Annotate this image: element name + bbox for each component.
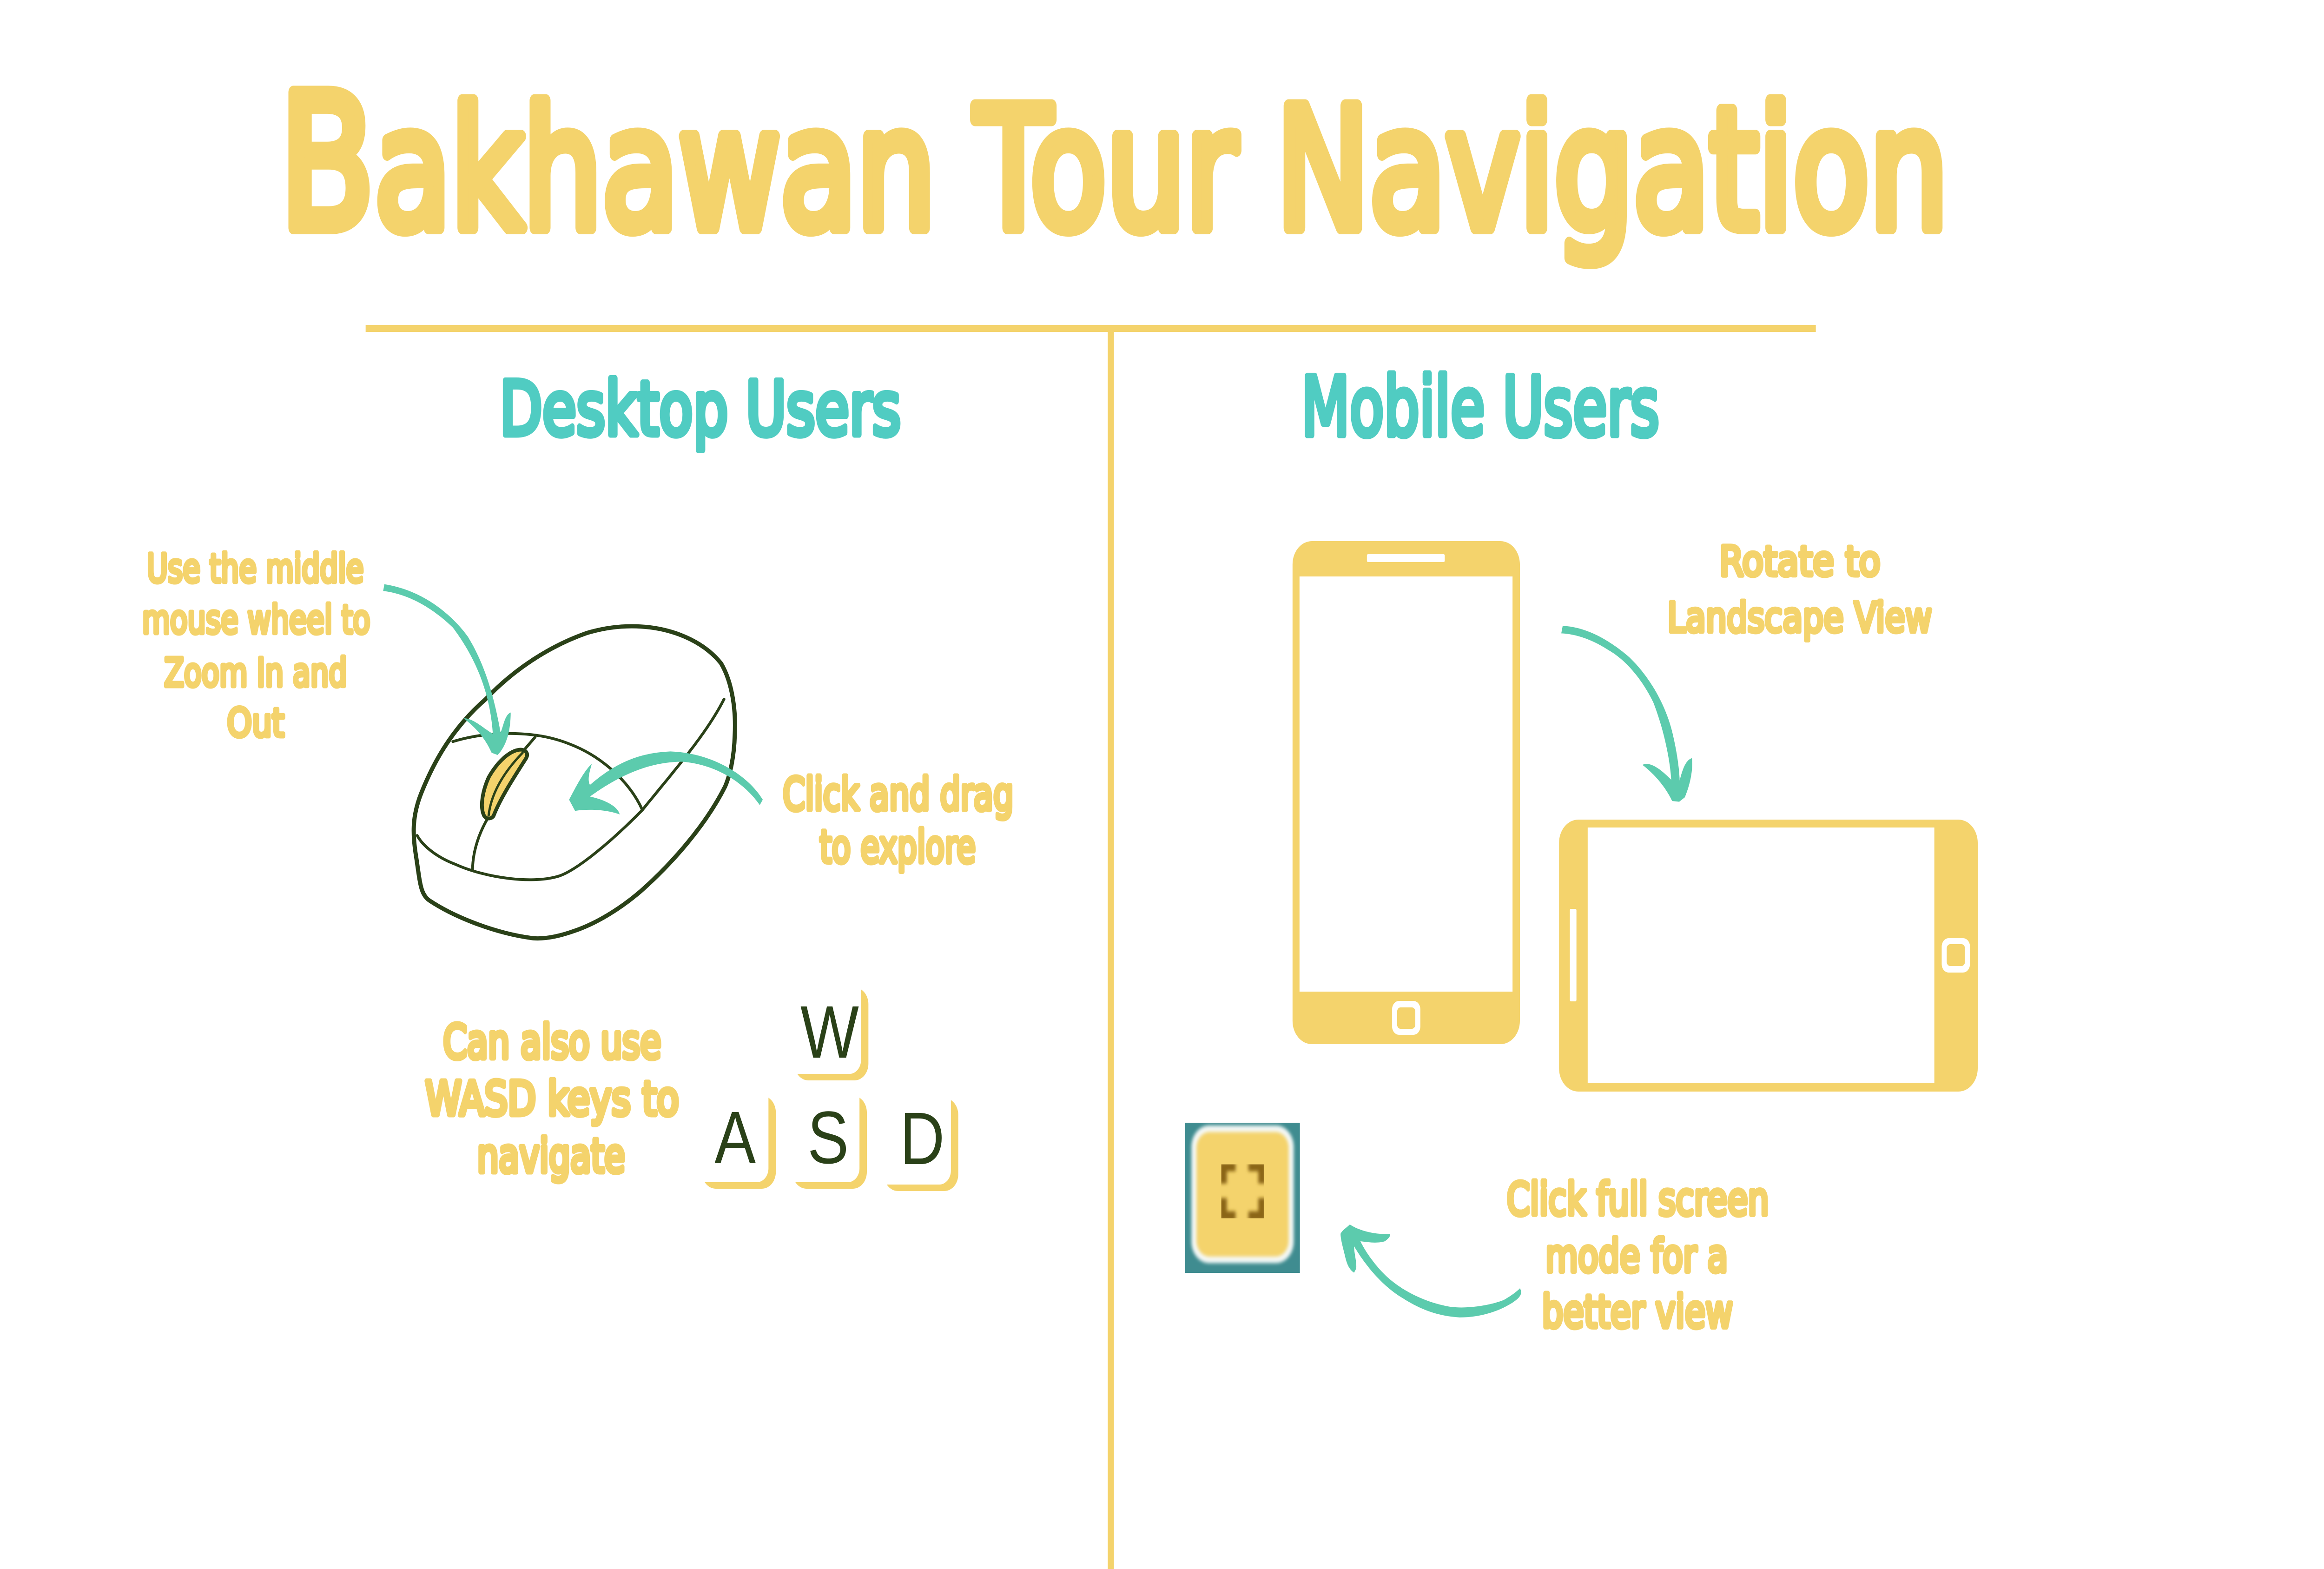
text: middle wheel: Use the middle [147,546,364,592]
text: wasd: WASD keys to [425,1072,679,1126]
key: A [693,1085,776,1189]
title: Bakhawan Tour Navigation [280,55,1948,272]
text: middle wheel [142,546,370,746]
text: rotate [1668,538,1932,642]
text: wasd: Can also use [443,1015,661,1069]
text: full screen: better view [1542,1286,1733,1338]
key: W [786,976,868,1080]
icon: mouse [414,626,735,939]
arrow: to left button [569,751,763,814]
text: wasd [425,1015,679,1183]
key: A: A [714,1097,756,1179]
icon: full screen button [1185,1123,1300,1273]
text: middle wheel: Zoom In and [164,650,347,696]
text: click and drag: to explore [819,821,976,873]
text: rotate: Landscape View [1668,595,1932,642]
text: rotate: Rotate to [1719,538,1881,586]
text: wasd: navigate [477,1129,625,1183]
heading: mobile users: Mobile Users [1301,359,1659,454]
icon: portrait phone [1293,541,1520,1044]
text: full screen: mode for a [1545,1230,1728,1282]
arrow: to mouse wheel [383,584,511,755]
key: S: S [807,1097,849,1179]
text: click and drag: Click and drag [783,768,1014,821]
key: D [876,1087,958,1191]
text: middle wheel: mouse wheel to [142,597,370,643]
key: S [785,1085,867,1189]
icon: landscape phone [1559,820,1978,1092]
arrow: to full screen [1340,1225,1521,1317]
text: full screen: Click full screen [1507,1173,1769,1225]
text: middle wheel: Out [227,701,284,746]
heading: desktop users: Desktop Users [500,365,901,452]
key: D: D [900,1098,944,1180]
text: full screen [1507,1173,1769,1338]
arrow: rotate [1561,626,1692,802]
text: click and drag [783,768,1014,873]
key: W: W [800,991,859,1074]
